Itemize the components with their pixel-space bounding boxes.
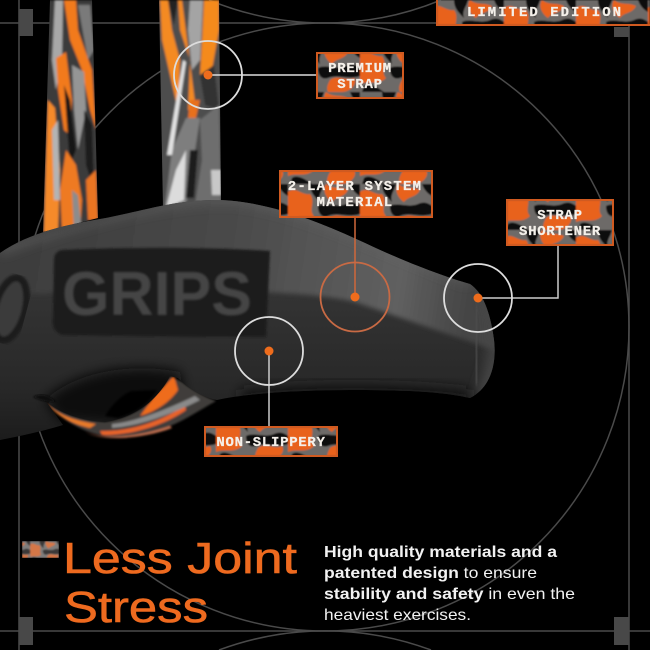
- left camo strap: [43, 0, 98, 232]
- heading: Less Joint: [63, 534, 297, 583]
- GRIPS logo patch: [53, 248, 270, 337]
- right camo strap: [159, 0, 221, 206]
- body text: stability and safety in even the: [324, 586, 575, 603]
- strap slit: [33, 395, 56, 402]
- callout: premium strap: PREMIUM: [328, 61, 392, 77]
- callout: premium strap: STRAP: [337, 77, 383, 93]
- callout: strap shortener: SHORTENER: [519, 224, 601, 240]
- heading: [63, 534, 297, 632]
- hand hole: [105, 390, 157, 418]
- heading camo icon: [22, 541, 59, 558]
- callout: non-slippery: [205, 317, 337, 456]
- callout: limited edition: [437, 0, 650, 25]
- callout: strap shortener: STRAP: [537, 208, 583, 224]
- callout: strap shortener: [444, 200, 613, 332]
- callout: 2-layer system material: MATERIAL: [317, 195, 393, 211]
- body text: [324, 544, 575, 624]
- lower strap loop: [45, 376, 216, 438]
- grip handle: [0, 200, 495, 440]
- heading: Stress: [64, 583, 208, 632]
- callout: premium strap: [174, 41, 403, 109]
- body text: heaviest exercises.: [324, 607, 471, 624]
- body text: High quality materials and a: [324, 544, 557, 561]
- callout: 2-layer system material: 2-LAYER SYSTEM: [288, 179, 422, 195]
- logo ring: [0, 274, 33, 344]
- body text: patented design to ensure: [324, 565, 537, 582]
- callout: non-slippery: NON-SLIPPERY: [216, 435, 326, 451]
- callout: 2-layer system material: [280, 171, 432, 332]
- callout: limited edition: LIMITED EDITION: [467, 5, 623, 21]
- GRIPS logo text: GRIPS: [62, 260, 252, 329]
